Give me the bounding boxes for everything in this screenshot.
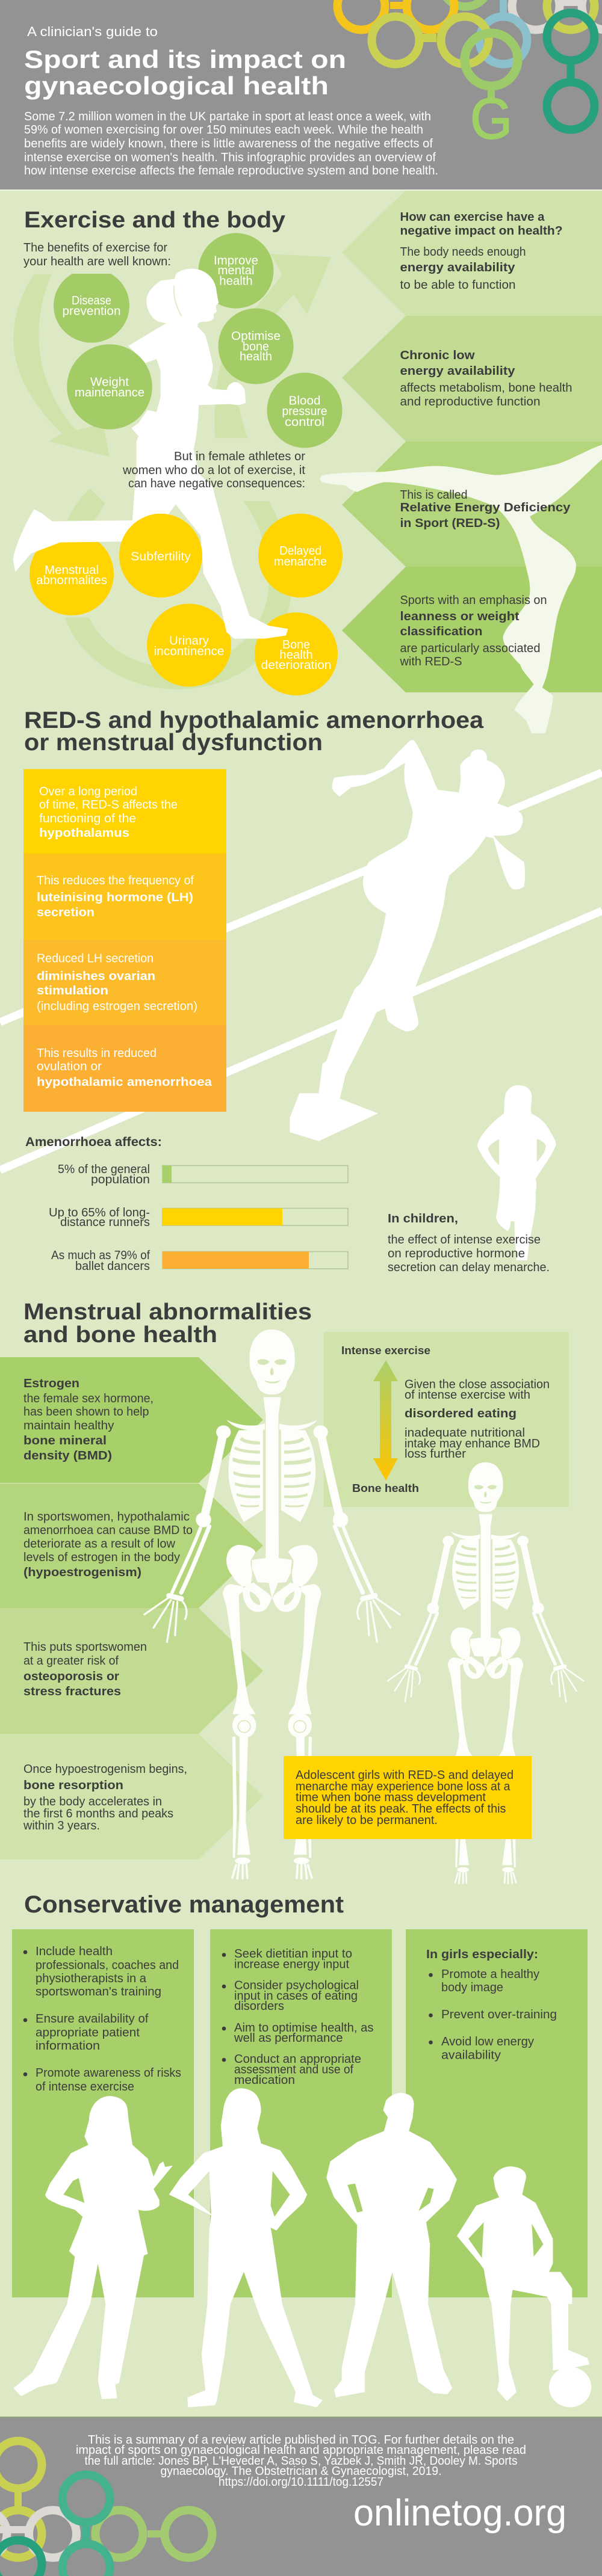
section: RED-S and hypothalamic amenorrhoea [0,707,602,1274]
benefit labels [63,254,327,429]
benefits intro [23,241,171,268]
panel 3 text: body image [441,1981,503,1994]
hormone cascade [23,769,226,1112]
left chevrons [0,1357,263,1860]
consequence labels: abnormalites [36,574,107,587]
right column text: This is called [400,488,467,502]
right column text: and reproductive function [400,395,541,408]
panel 1 text: Include health [36,1945,113,1958]
panel 2 text [222,1947,373,2087]
bar: ballet dancers: As much as 79% of [51,1249,150,1262]
panel 2 text: disorders [234,2000,284,2013]
panel 2 text: Conduct an appropriate [234,2053,361,2066]
consequence labels: Bone [282,638,310,652]
callout: adolescent girls: time when bone mass development [296,1791,486,1804]
heading [24,707,483,756]
bar: general population: 5% of the general [58,1163,150,1176]
panel 2 text: Aim to optimise health, as [234,2021,373,2035]
article reference: impact of sports on gynaecological health and appropriate management, please read [76,2444,526,2457]
figure: girl with ball [457,2166,589,2401]
panel 1 text: information [36,2039,100,2053]
callout: adolescent girls: Adolescent girls with RED-S and delayed [296,1769,514,1782]
panel 1 text: Promote awareness of risks [36,2066,181,2080]
benefits intro: The benefits of exercise for [23,241,167,254]
in children text: on reproductive hormone [388,1247,525,1260]
amenorrhoea bar chart: Amenorrhoea affects: [25,1135,162,1149]
article reference: gynaecology. The Obstetrician & Gynaecologist, 2019. [160,2465,442,2478]
negative consequences intro: women who do a lot of exercise, it [122,464,305,477]
benefit labels: health [240,350,272,363]
right column text: in Sport (RED-S) [400,517,500,530]
chevron text: fractures: This puts sportswomen [23,1641,147,1654]
chevron text: estrogen: the female sex hormone, [23,1392,154,1405]
benefit labels: bone [243,340,269,354]
panel 1 text: physiotherapists in a [36,1972,147,1985]
step 2: This reduces the frequency of [37,874,194,887]
panel 2 text: increase energy input [234,1958,349,1971]
bar: long-distance runners: Up to 65% of long- [49,1206,150,1219]
chevron text: estrogen: Estrogen [23,1377,79,1390]
step 4: ovulation or [37,1060,102,1073]
benefit labels: prevention [63,304,120,318]
right column text: affects metabolism, bone health [400,381,572,395]
benefit labels: Improve [214,254,258,267]
consequence labels: menarche [274,555,327,569]
right column text: energy availability [400,365,515,378]
chevron text: hypoestrogenism: amenorrhoea can cause BMD to [23,1524,193,1537]
intro text: 59% of women exercising for over 150 minutes each week. While the health [24,123,423,137]
heading: and bone health [23,1322,217,1348]
panel 2 text: well as performance [234,2032,343,2045]
chevron text: estrogen [23,1377,154,1462]
chevron text: fractures: stress fractures [23,1685,121,1698]
bar: general population: population [91,1173,150,1186]
bar: long-distance runners: distance runners [60,1216,150,1229]
consequence labels: incontinence [154,645,224,658]
benefit labels: Blood [289,395,320,408]
benefit labels: maintenance [75,386,144,399]
figure: woman with clipboard [13,2096,173,2399]
child silhouette [477,1085,556,1260]
consequence labels: Delayed [279,544,321,558]
amenorrhoea bar chart [25,1135,348,1273]
step 1: Over a long period [39,785,137,798]
right column text: leanness or weight [400,610,520,623]
right column text: Relative Energy Deficiency [400,501,571,514]
bar: general population [58,1163,348,1186]
arrow box text: intake may enhance BMD [405,1437,540,1450]
large skeleton [144,1330,400,1878]
panel 3 text: Prevent over-training [441,2008,557,2021]
heading: Exercise and the body [24,208,285,233]
right column text: negative impact on health? [400,224,562,238]
benefit labels: control [285,416,324,429]
silhouettes of four figures [13,2088,591,2407]
chevron text: bone resorption: by the body accelerates in [23,1795,162,1808]
panel 3 text [426,1948,557,2062]
chevron text: hypoestrogenism [23,1510,193,1579]
logo letter G: G [470,87,512,151]
panel backgrounds [12,1929,588,2297]
heading: RED-S and hypothalamic amenorrhoea [24,707,483,733]
title: Sport and its impact on [24,45,346,73]
step 4 [37,1047,213,1089]
panel 1 text: professionals, coaches and [36,1959,179,1972]
chevron text: fractures [23,1641,147,1698]
figure: woman hands on hips [169,2088,323,2407]
chevron text: bone resorption: within 3 years. [23,1819,100,1832]
bar: long-distance runners [49,1206,348,1229]
benefit labels: Disease [72,294,111,307]
article reference: This is a summary of a review article published in TOG. For further details on the [88,2433,514,2447]
consequence labels: deterioration [261,659,331,672]
right column text: classification [400,625,483,638]
heading: Menstrual abnormalities [23,1299,312,1325]
callout: adolescent girls: should be at its peak. The effects of this [296,1802,506,1816]
panel 3 text: Promote a healthy [441,1968,539,1981]
in children text: secretion can delay menarche. [388,1261,550,1274]
step 2 [37,874,194,919]
intro text [24,110,438,177]
circles in front of the runner [54,274,343,597]
callout: adolescent girls: are likely to be permanent. [296,1814,438,1827]
step 3 [37,952,197,1013]
step 4: hypothalamic amenorrhoea [37,1076,213,1089]
panel 3 text: In girls especially: [426,1948,538,1961]
callout: adolescent girls: menarche may experience bone loss at a [296,1780,510,1793]
step 3: Reduced LH secretion [37,952,154,965]
step 1 [39,785,178,840]
chevron text: fractures: at a greater risk of [23,1654,119,1668]
step 3: diminishes ovarian [37,970,155,983]
right column text: How can exercise have a [400,211,545,224]
benefit labels: health [219,275,253,288]
chevron text: estrogen: has been shown to help [23,1405,149,1419]
step 3: stimulation [37,984,108,997]
arrow box text: Intense exercise [341,1345,430,1357]
callout: adolescent girls [284,1756,532,1839]
panel 2 text: assessment and use of [234,2063,353,2077]
arrow box text: Given the close association [405,1378,550,1391]
gymnast silhouette [320,445,602,733]
chevron text: bone resorption: the first 6 months and peaks [23,1807,173,1820]
sprinter silhouette [290,740,525,1141]
step 3: (including estrogen secretion) [37,1000,197,1013]
arrow box text: of intense exercise with [405,1388,530,1402]
chevron text: estrogen: density (BMD) [23,1449,112,1462]
right chevrons [342,191,602,692]
logo rings [337,0,602,130]
article reference: the full article: Jones BP, L'Heveder A, Saso S, Yazbek J, Smith JR, Dooley M. Sports [84,2454,518,2468]
title: gynaecological health [24,72,329,100]
chevron text: hypoestrogenism: In sportswomen, hypothalamic [23,1510,190,1523]
chevron text: hypoestrogenism: (hypoestrogenism) [23,1566,141,1579]
right column text: Chronic low [400,349,475,362]
in children text [388,1212,550,1274]
benefit labels: mental [218,264,254,277]
chevron text: fractures: osteoporosis or [23,1670,119,1683]
football [549,2367,591,2407]
bar: ballet dancers [51,1249,348,1273]
intro text: benefits are widely known, there is little awareness of the negative effects of [24,137,433,150]
consequence labels: Subfertility [131,550,191,564]
chevron text: bone resorption: bone resorption [23,1779,123,1792]
kicker: A clinician's guide to [27,24,158,39]
consequence labels: health [279,649,313,662]
runner silhouette [13,269,288,639]
negative consequences intro: But in female athletes or [174,450,305,463]
arrow: intense exercise to bone health [373,1360,398,1481]
small skeleton [388,1462,583,1884]
step 1: of time, RED-S affects the [39,798,178,812]
right column text: to be able to function [400,279,515,292]
right column text: with RED-S [400,655,462,668]
right column text [400,211,572,668]
negative consequences intro: can have negative consequences: [128,477,305,490]
running track lines [0,772,602,1170]
bar: ballet dancers: ballet dancers [75,1260,150,1273]
chevron text: bone resorption: Once hypoestrogenism begins, [23,1763,187,1776]
step 2: luteinising hormone (LH) [37,891,193,904]
intro text: Some 7.2 million women in the UK partake in sport at least once a week, with [24,110,431,123]
heading: or menstrual dysfunction [24,730,323,756]
panel 1 text: sportswoman's training [36,1985,161,1998]
panel 3 text: Avoid low energy [441,2035,534,2048]
heading [23,1299,312,1348]
negative consequences intro [122,450,305,490]
arrow box text: disordered eating [405,1407,517,1420]
in children text: In children, [388,1212,458,1225]
panel 2 text: Consider psychological [234,1979,359,1992]
right column text: The body needs enough [400,245,526,259]
chevron text: estrogen: bone mineral [23,1434,107,1447]
right column text: energy availability [400,261,515,274]
heading: Conservative management [24,1891,344,1918]
panel 1 text: of intense exercise [36,2080,134,2094]
panel 2 text: Seek dietitian input to [234,1947,352,1961]
panel: header [0,0,602,191]
intro text: how intense exercise affects the female reproductive system and bone health. [24,164,438,177]
section: conservative management [12,1891,591,2407]
chevron text: estrogen: maintain healthy [23,1419,114,1432]
panel 2 text: medication [234,2074,295,2087]
footer rings [0,2441,212,2576]
curved arrows [13,254,331,689]
arrow box text [341,1345,550,1494]
step 1: functioning of the [39,812,136,825]
chevron text: hypoestrogenism: levels of estrogen in the body [23,1551,180,1564]
arrow box text: Bone health [352,1482,419,1494]
benefit labels: pressure [282,405,327,418]
article reference [76,2433,526,2489]
benefits intro: your health are well known: [23,255,171,268]
consequence labels: Urinary [169,634,209,647]
section: menstrual abnormalities and bone health [0,1299,583,1884]
intro text: intense exercise on women's health. This infographic provides an overview of [24,151,436,164]
chevron text: bone resorption [23,1763,187,1832]
website: onlinetog.org [353,2492,566,2534]
benefit labels: Weight [90,376,129,389]
right column text: Sports with an emphasis on [400,594,547,607]
exercise and bone box [324,1332,569,1507]
chevron text: hypoestrogenism: deteriorate as a result of low [23,1538,176,1551]
consequence labels [36,544,331,672]
circles behind the runner [29,233,338,695]
panel 1 text [23,1945,181,2094]
step 1: hypothalamus [39,827,129,840]
title [24,45,346,100]
step 4: This results in reduced [37,1047,157,1060]
arrow box text: inadequate nutritional [405,1426,525,1440]
panel 1 text: Ensure availability of [36,2012,149,2026]
arrow box text: loss further [405,1447,466,1461]
in children text: the effect of intense exercise [388,1233,541,1246]
consequence labels: Menstrual [45,564,99,577]
article reference: https://doi.org/10.1111/tog.12557 [219,2476,383,2489]
panel 1 text: appropriate patient [36,2026,140,2039]
benefit labels: Optimise [231,330,281,343]
step 2: secretion [37,906,95,919]
figure: man [326,2093,457,2397]
panel 2 text: input in cases of eating [234,1989,358,2003]
section: exercise and the body [13,191,602,733]
panel 3 text: availability [441,2049,501,2062]
right column text: are particularly associated [400,642,541,655]
panel: footer [0,2417,602,2576]
